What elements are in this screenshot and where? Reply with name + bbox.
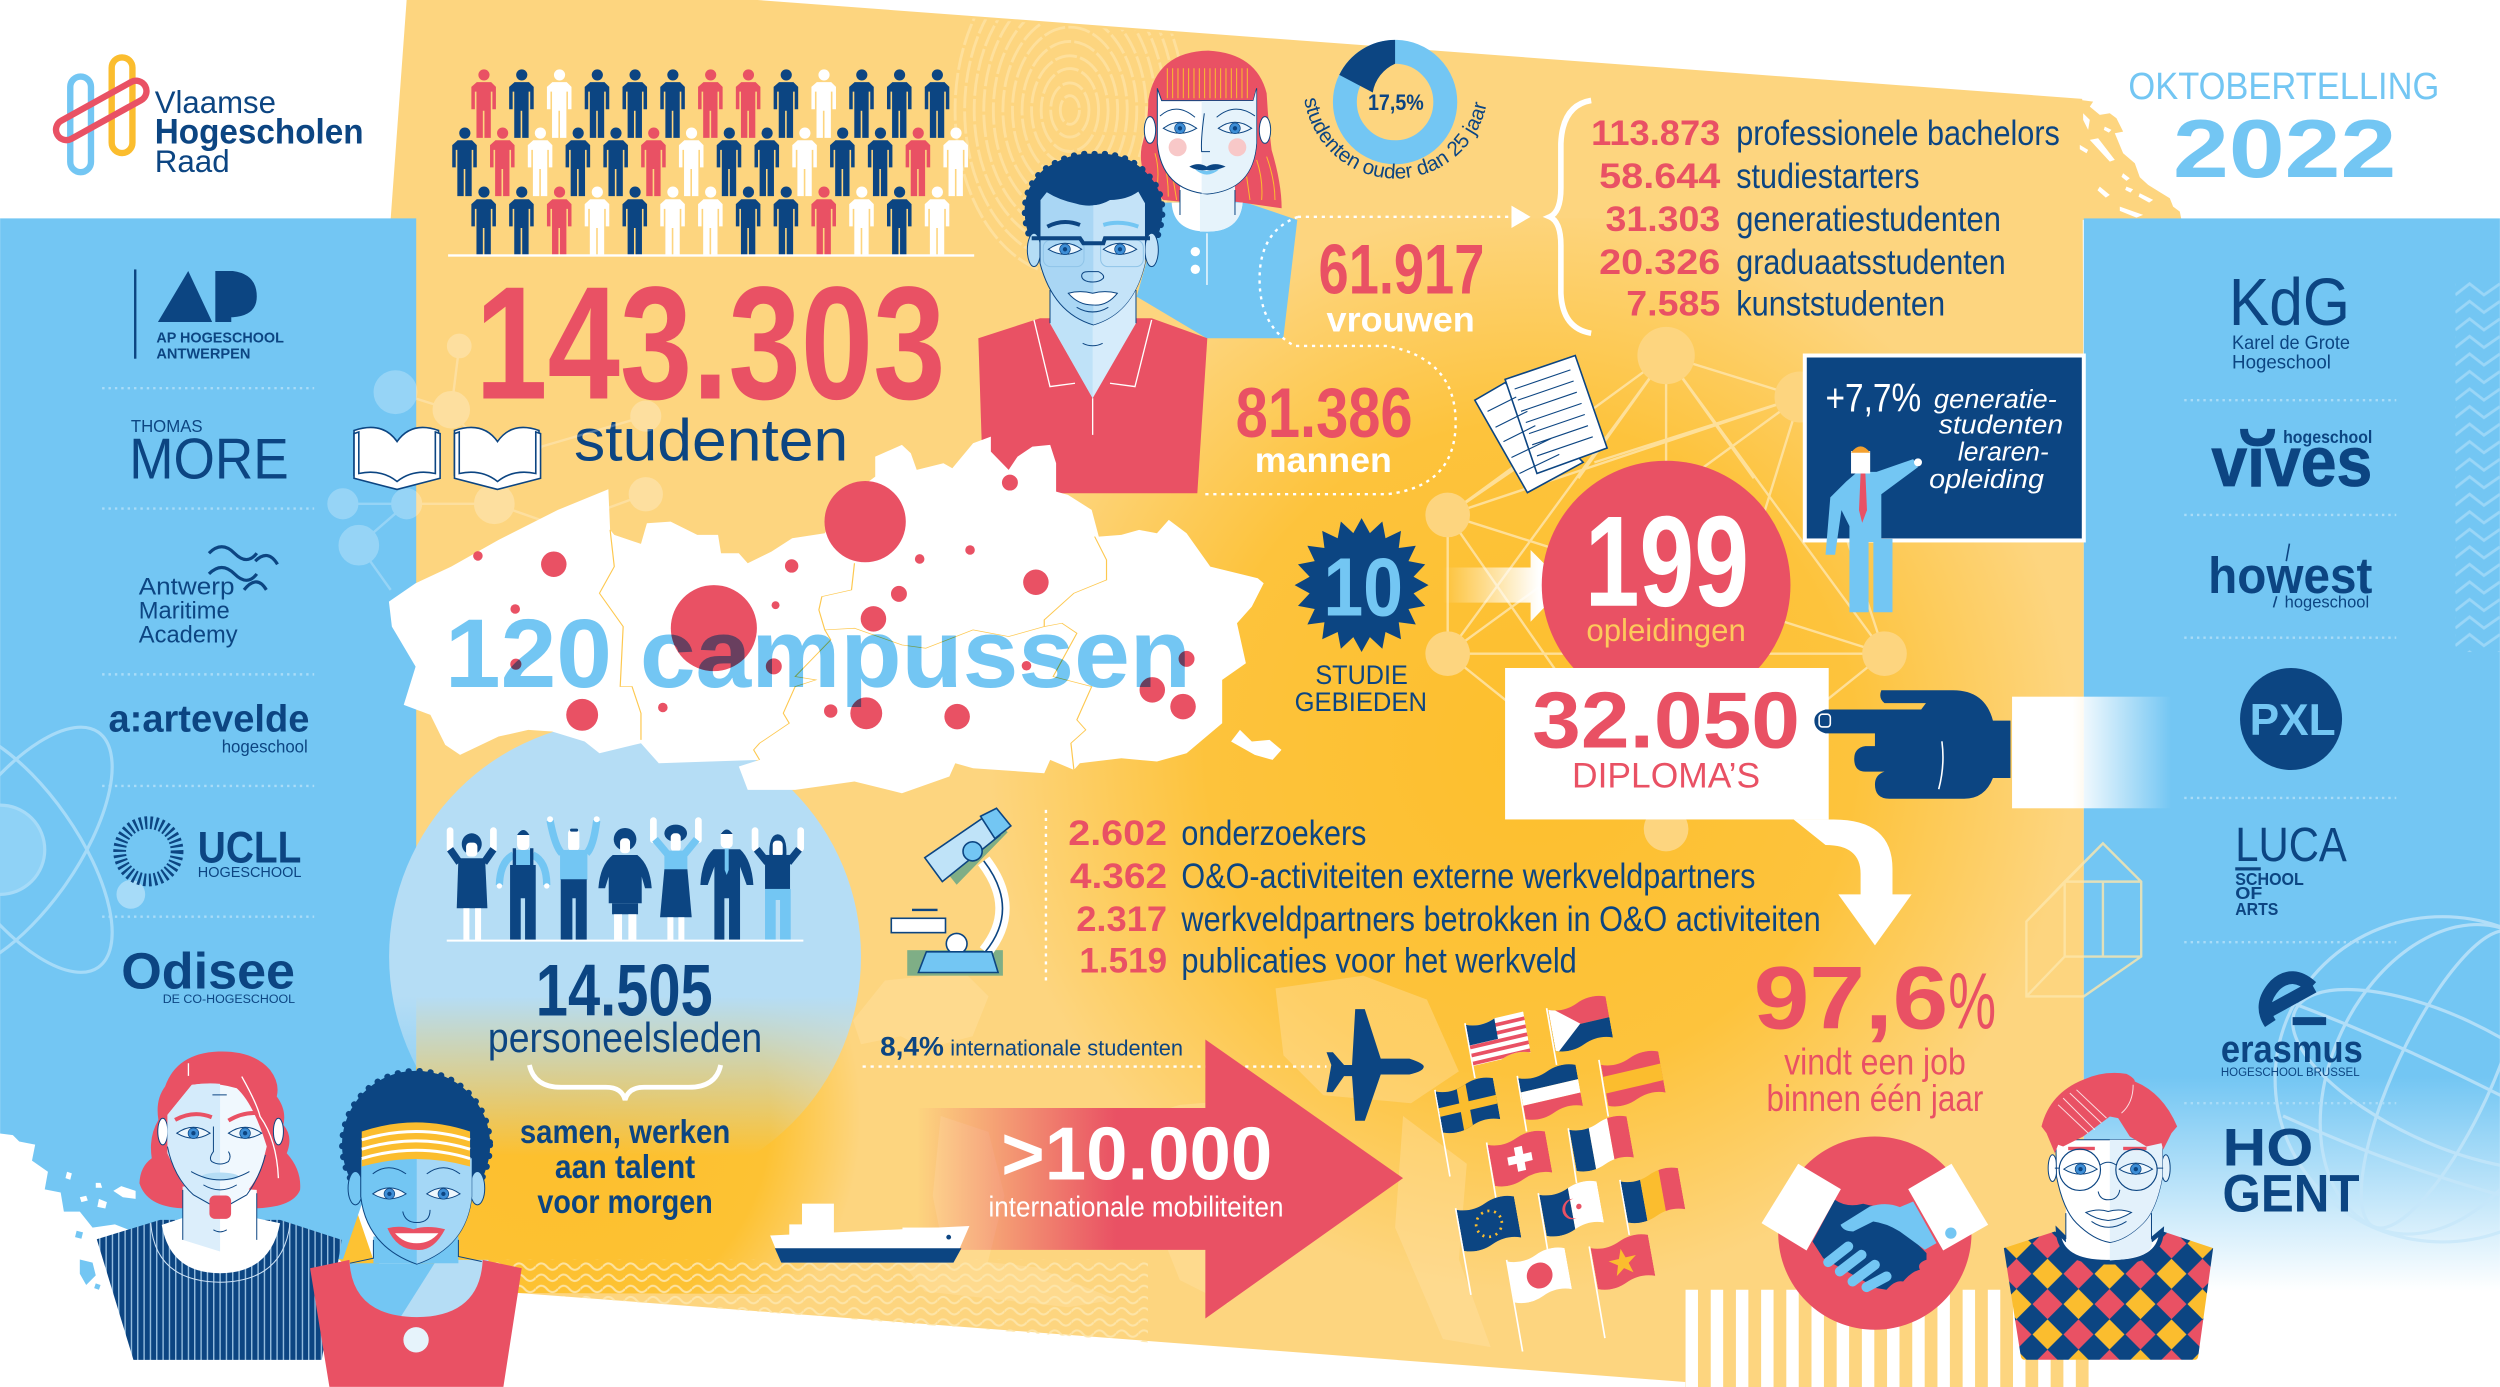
- background: faint world map: [853, 972, 1491, 1347]
- arrow: white curved down: [1794, 819, 1912, 945]
- badge: 10 studiegebieden: GEBIEDEN: [1295, 686, 1427, 717]
- school logo: Vives: vives: [2211, 423, 2372, 501]
- text: 8,4% internationale studenten: internationale studenten: [950, 1035, 1183, 1060]
- school logo: HoGent: [2222, 1118, 2360, 1224]
- school logo: KdG: Hogeschool: [2232, 352, 2331, 373]
- fingerprint decoration: [955, 0, 1185, 276]
- school logo: Howest: hogeschool: [2285, 592, 2369, 611]
- panel: blackboard teacher education: +7,7%: [1826, 376, 1921, 420]
- school logo: PXL: PXL: [2250, 696, 2336, 745]
- dotted line: [863, 1066, 1327, 1068]
- stat: 14.505 personeelsleden: [488, 950, 762, 1221]
- brace: [1550, 100, 1591, 333]
- background: yellow panel: [391, 0, 2084, 1387]
- school logo: KdG: [2229, 265, 2350, 373]
- arrow: internationale mobiliteiten: internationale mobiliteiten: [989, 1191, 1283, 1223]
- figure 1: [450, 831, 493, 940]
- figure 2: [497, 830, 549, 940]
- map title: 120 campussen: [445, 599, 1191, 708]
- list: research: [1068, 814, 1821, 980]
- staff figures: [447, 816, 803, 942]
- donut chart: 17,5% students over 25: [1304, 40, 1486, 179]
- school logo: Odisee: DE CO-HOGESCHOOL: [163, 992, 295, 1006]
- stat: 81.386 mannen: 81.386: [1236, 374, 1413, 452]
- panel: right schools: [2026, 218, 2500, 1291]
- list: research: 2.317: [1076, 900, 1167, 939]
- list: research: publicaties voor het werkveld: [1181, 941, 1577, 980]
- arrow: to 199: [1443, 550, 1566, 622]
- icon: open books: [354, 427, 541, 489]
- school logo: Thomas More: THOMAS: [131, 416, 203, 436]
- list: research: 2.602: [1068, 814, 1167, 853]
- stat: 14.505 personeelsleden: samen, werken: [520, 1114, 730, 1151]
- dress neckline: [343, 1263, 488, 1320]
- network decoration behind 199: [1425, 327, 1907, 851]
- list: research: werkveldpartners betrokken in O&O activiteiten: [1181, 900, 1821, 939]
- text: 8,4% internationale studenten: [880, 1030, 1183, 1061]
- brace: [529, 1065, 721, 1100]
- flag: Spain: [1601, 1050, 1666, 1106]
- stat: 14.505 personeelsleden: aan talent: [555, 1149, 695, 1186]
- icon: pointing hand: [1814, 690, 2171, 808]
- school logo: LUCA: ARTS: [2235, 899, 2278, 919]
- stat: 81.386 mannen: mannen: [1255, 441, 1392, 480]
- list: research: 1.519: [1079, 941, 1167, 980]
- flag: Japan: [1508, 1248, 1572, 1304]
- school logo: Vives: hogeschool: [2283, 427, 2372, 447]
- flag: Netherlands: [1518, 1062, 1584, 1123]
- neck: [183, 1187, 257, 1252]
- school logo: Antwerp Maritime Academy: [139, 547, 278, 648]
- pendant: [403, 1327, 429, 1353]
- stat: 199 opleidingen: 199: [1585, 490, 1749, 634]
- stat: 97,6% job: 97,6: [1754, 947, 1948, 1047]
- arrow: internationale mobiliteiten: >10.000: [1001, 1112, 1272, 1196]
- stat box: 32.050 diploma's: DIPLOMA’S: [1572, 757, 1760, 796]
- portrait: man with glasses: [978, 154, 1207, 493]
- school logo: Artevelde: hogeschool: [222, 736, 308, 756]
- figure 4: [598, 828, 652, 940]
- glasses: [2059, 1149, 2100, 1190]
- stat: 14.505 personeelsleden: personeelsleden: [488, 1014, 762, 1061]
- school logo: Erasmus: erasmus: [2221, 1028, 2363, 1071]
- panel: blackboard teacher education: opleiding: [1929, 466, 2044, 494]
- flag: Vietnam: [1590, 1231, 1656, 1293]
- panel: blackboard teacher education: leraren-: [1958, 439, 2049, 467]
- logo: Vlaamse Hogescholen Raad: Vlaamse: [155, 84, 276, 120]
- stat box: 32.050 diploma's: [1505, 668, 1829, 819]
- stat box: 32.050 diploma's: 32.050: [1532, 676, 1800, 765]
- map outline: [389, 437, 1281, 793]
- school logo: Thomas More: MORE: [129, 427, 289, 491]
- flag: USA: [1465, 1008, 1531, 1066]
- neck: [2058, 1231, 2161, 1262]
- background: atom decoration: [0, 697, 148, 1002]
- panel: blackboard teacher education: [1805, 356, 2084, 612]
- list: student types: 7.585: [1626, 285, 1720, 324]
- stripes: [1685, 1290, 2089, 1387]
- icon: teacher: [1826, 446, 1922, 612]
- flag: Switzerland: [1487, 1128, 1553, 1189]
- school logo: LUCA: SCHOOL: [2235, 869, 2304, 889]
- school logo: HoGent: GENT: [2222, 1165, 2360, 1224]
- school logo: Erasmus: HOGESCHOOL BRUSSEL: [2221, 1065, 2360, 1079]
- school logo: Antwerp Maritime Academy: Antwerp: [139, 574, 234, 601]
- list: student types: graduaatsstudenten: [1736, 243, 2006, 282]
- school logo: UCLL: UCLL: [198, 823, 301, 872]
- sweater: [2004, 1231, 2213, 1360]
- flag poles: [1435, 1008, 1629, 1351]
- background: globe decoration: [2268, 885, 2500, 1274]
- divider: [1045, 810, 1047, 980]
- map: Flanders with campuses: [389, 437, 1281, 793]
- flag: EU: [1456, 1193, 1522, 1254]
- figure 6: [700, 829, 753, 940]
- stat: 97,6% job: binnen één jaar: [1767, 1078, 1983, 1119]
- school logo: KdG: KdG: [2229, 265, 2350, 340]
- school logo: AP Hogeschool Antwerpen: AP HOGESCHOOL: [156, 330, 284, 347]
- shirt: [1137, 202, 1297, 338]
- figure 3: [547, 816, 600, 940]
- headband: [362, 1122, 470, 1167]
- badge: 10 studiegebieden: [1295, 518, 1429, 717]
- school logo: Artevelde: a:artevelde: [109, 698, 309, 741]
- background: brush edge top right: [2080, 100, 2181, 220]
- school logo: LUCA: OF: [2235, 883, 2263, 903]
- ears: [158, 1118, 168, 1145]
- list: student types: studiestarters: [1736, 157, 1920, 196]
- list: student types: 20.326: [1599, 243, 1720, 282]
- logo: Vlaamse Hogescholen Raad: Hogescholen: [155, 112, 364, 151]
- school logo: Erasmus: [2221, 978, 2363, 1079]
- stat: 97,6% job: vindt een job: [1784, 1042, 1966, 1083]
- flags: [1435, 993, 1686, 1351]
- neck: [1050, 283, 1136, 398]
- list: research: onderzoekers: [1181, 814, 1366, 853]
- portrait: man with long hair: [97, 1052, 342, 1360]
- background: yellow splash behind portraits: [293, 1175, 413, 1283]
- arrow: internationale mobiliteiten: [917, 1039, 1403, 1318]
- flag: Algeria: [1539, 1178, 1605, 1239]
- stat: 61.917 vrouwen: 61.917: [1319, 230, 1484, 308]
- panel: blackboard teacher education: generatie-: [1934, 386, 2057, 414]
- ears: [1027, 233, 1041, 267]
- icon: ship: [770, 1204, 969, 1263]
- shirt: [97, 1220, 342, 1360]
- heading: Oktobertelling 2022: OKTOBERTELLING: [2128, 65, 2439, 108]
- ears: [1144, 117, 1156, 143]
- stat: 143.303 studenten: studenten: [574, 409, 848, 474]
- hair: [2042, 1073, 2177, 1153]
- badge: 10 studiegebieden: STUDIE: [1315, 659, 1408, 690]
- portrait: young man with round glasses: [2004, 1073, 2213, 1360]
- stat: 61.917 vrouwen: vrouwen: [1327, 301, 1475, 340]
- stat: 143.303 studenten: 143.303: [475, 254, 945, 434]
- school logo: PXL: [2240, 668, 2342, 770]
- list: student types: 58.644: [1599, 157, 1721, 196]
- dress: [310, 1260, 522, 1387]
- face: [1157, 88, 1257, 194]
- ears: [348, 1172, 363, 1205]
- shirt: [978, 318, 1207, 493]
- pictogram: crowd of students: [448, 69, 974, 257]
- panel: blackboard teacher education: studenten: [1939, 412, 2063, 440]
- list: student types: 113.873: [1591, 114, 1720, 153]
- school logo: KdG: Karel de Grote: [2232, 333, 2350, 354]
- placket and buttons: [1205, 233, 1209, 285]
- school logo: HoGent: HO: [2222, 1118, 2313, 1177]
- neck: [373, 1237, 458, 1263]
- text: 8,4% internationale studenten: 8,4%: [880, 1030, 944, 1061]
- stat: 97,6% job: [1754, 947, 1996, 1119]
- list: student types: professionele bachelors: [1736, 114, 2060, 153]
- stat: 14.505 personeelsleden: voor morgen: [537, 1184, 713, 1221]
- logo: Vlaamse Hogescholen Raad: Raad: [155, 143, 230, 179]
- figure 5: [653, 821, 698, 940]
- list: student types: generatiestudenten: [1736, 200, 2001, 239]
- flag: France: [1569, 1113, 1635, 1174]
- face: [167, 1084, 267, 1210]
- dividers between logos: [102, 388, 2396, 1103]
- logo: Vlaamse Hogescholen Raad: [52, 57, 364, 179]
- stat: 81.386 mannen: [1236, 374, 1413, 480]
- flag: Romania: [1620, 1165, 1686, 1226]
- school logo: Antwerp Maritime Academy: Academy: [139, 621, 238, 648]
- school logo: LUCA: LUCA: [2235, 819, 2347, 872]
- stat: 143.303 studenten: [475, 254, 945, 474]
- stat: 14.505 personeelsleden: 14.505: [536, 950, 713, 1032]
- portrait: woman with red hair: [1137, 51, 1297, 338]
- dotted connectors: [1204, 217, 1511, 494]
- school logo: UCLL: HOGESCHOOL: [198, 865, 301, 881]
- figure 7: [755, 831, 801, 940]
- list: research: 4.362: [1070, 857, 1167, 896]
- stat: 199 opleidingen: [1542, 461, 1790, 709]
- hair: [139, 1052, 300, 1208]
- hair: [1025, 154, 1162, 243]
- circle: staff: [389, 721, 861, 1193]
- stat: 97,6% job: %: [1948, 956, 1996, 1045]
- background: wave pattern: [462, 1259, 1148, 1342]
- school logo: AP Hogeschool Antwerpen: ANTWERPEN: [156, 346, 250, 363]
- school logo: AP Hogeschool Antwerpen: [134, 269, 284, 363]
- icon: airplane: [1327, 1009, 1424, 1121]
- stat: 61.917 vrouwen: [1319, 230, 1484, 340]
- flag: Sweden: [1435, 1075, 1501, 1136]
- background: wireframe house: [2026, 843, 2141, 996]
- heading: Oktobertelling 2022: 2022: [2173, 102, 2396, 195]
- icon: microscope: [891, 808, 1011, 976]
- list: student types: [1591, 114, 2060, 324]
- school logo: Howest: howest: [2208, 547, 2372, 604]
- eyes: [2064, 1163, 2097, 1174]
- school logo: Antwerp Maritime Academy: Maritime: [139, 598, 230, 625]
- arrow tip: [1511, 206, 1531, 228]
- background: molecule decoration: [329, 335, 662, 590]
- school logo: Odisee: Odisee: [121, 942, 295, 999]
- heading: Oktobertelling 2022: [2128, 65, 2439, 195]
- badge: 10 studiegebieden: 10: [1323, 540, 1403, 633]
- list: research: O&O-activiteiten externe werkveldpartners: [1181, 857, 1755, 896]
- face: [361, 1158, 472, 1264]
- portrait: woman with headband: [310, 1071, 522, 1387]
- list: student types: kunststudenten: [1736, 285, 1945, 324]
- school logo: LUCA: [2235, 819, 2347, 919]
- hair: [342, 1071, 490, 1219]
- school logo: UCLL: [120, 823, 301, 881]
- icon: documents: [1475, 356, 1607, 493]
- list: student types: 31.303: [1606, 200, 1720, 239]
- ears: [2048, 1155, 2057, 1181]
- panel: left schools: [0, 218, 416, 1290]
- campus dots: [473, 475, 1196, 731]
- flag: Czech: [1548, 996, 1613, 1052]
- donut chart: 17,5% students over 25: 17,5%: [1368, 90, 1424, 115]
- neck: [1172, 187, 1243, 232]
- icon: handshake: [1762, 1136, 1988, 1330]
- face: [1040, 192, 1145, 325]
- donut chart: 17,5% students over 25: studenten ouder dan 25 jaar: [1304, 98, 1486, 179]
- background: zigzag: [2455, 281, 2500, 652]
- stat: 199 opleidingen: opleidingen: [1586, 612, 1746, 648]
- head: [2056, 1140, 2162, 1242]
- hair: [1141, 51, 1282, 208]
